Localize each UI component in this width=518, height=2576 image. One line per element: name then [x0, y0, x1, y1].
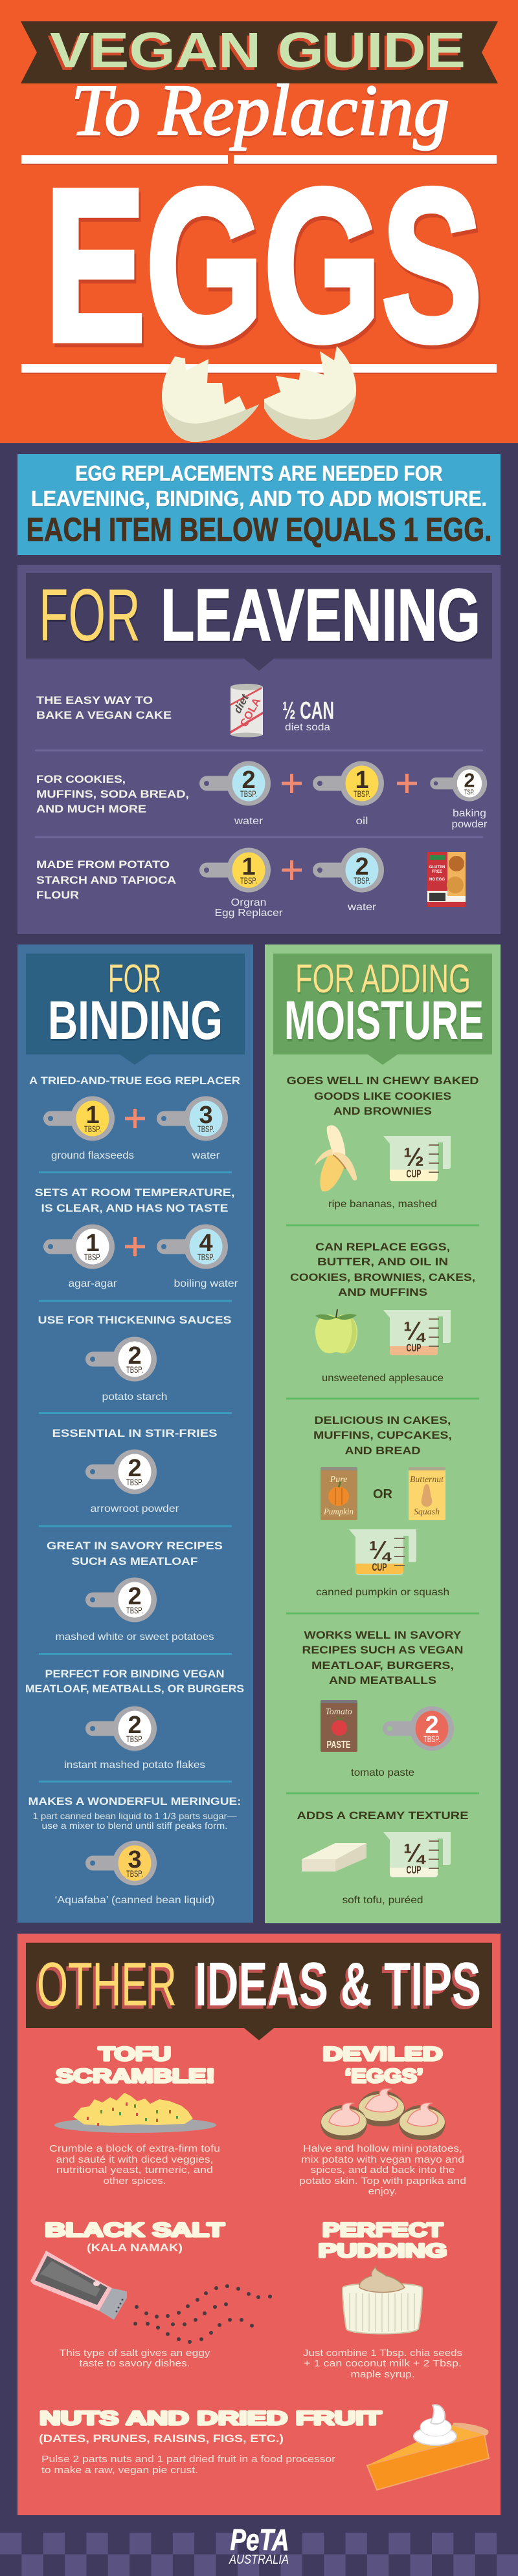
labels: leavening row two: water: [234, 816, 264, 827]
text: sets at room temperature: [35, 1187, 234, 1214]
row text: potato starch and tapioca: STARCH AND TAPIOCA: [36, 875, 176, 886]
plus: [125, 1237, 145, 1256]
icon: quarter cup tofu: ¼: [403, 1839, 426, 1868]
icon: salt grains: [133, 2284, 272, 2344]
spoon: 1 tbsp agar-agar: 1: [85, 1230, 100, 1257]
labels: flaxseeds and water: ground flaxseeds: [51, 1150, 134, 1161]
heading: for leavening: FOR: [39, 576, 141, 659]
plus: [125, 1109, 145, 1128]
spoon: 3 tbsp aquafaba: TBSP.: [126, 1869, 143, 1879]
icon: quarter cup applesauce: CUP: [407, 1342, 421, 1354]
labels: flaxseeds and water: [51, 1150, 220, 1161]
text: deviled eggs instructions: Halve and hollow mini potatoes,: [303, 2143, 462, 2154]
labels: leavening row three: Egg Replacer: [215, 908, 283, 919]
amount: half can diet soda: [282, 697, 334, 733]
text: tofu scramble instructions: other spices.: [104, 2176, 166, 2187]
spoon: 2 tsp baking powder: [430, 765, 487, 802]
labels: agar-agar and boiling water: boiling water: [174, 1278, 238, 1289]
divider line top: [21, 154, 497, 165]
spoon: 2 tbsp water: 2: [242, 767, 256, 794]
icon: canned squash: Butternut: [410, 1475, 444, 1485]
icon: diet cola can: COLA: [238, 695, 263, 729]
text: or: OR: [373, 1487, 393, 1501]
label: soft tofu: soft tofu, puréed: [342, 1895, 423, 1906]
heading: for leavening: FOR: [39, 574, 141, 657]
text: works well in savory: RECIPES SUCH AS VEGAN: [302, 1644, 464, 1656]
text: deviled eggs instructions: enjoy.: [368, 2186, 398, 2197]
spoon: 2 tbsp potato starch: TBSP.: [126, 1365, 143, 1375]
icon: quarter cup tofu: [383, 1832, 451, 1877]
label: tomato paste: tomato paste: [351, 1767, 414, 1778]
text: meringue: use a mixer to blend until stiff peaks form.: [41, 1820, 228, 1831]
spoon: 3 tbsp water: TBSP.: [197, 1124, 214, 1134]
text: nuts and dried fruit description: to make a raw, vegan pie crust.: [41, 2465, 198, 2476]
row text: potato starch and tapioca: [36, 859, 176, 901]
spoon: 2 tbsp potato flakes: TBSP.: [126, 1734, 143, 1744]
text: tofu scramble instructions: [49, 2143, 220, 2187]
icon: quarter cup applesauce: [383, 1310, 451, 1355]
heading: perfect pudding: PERFECT: [322, 2220, 443, 2241]
spoon: 1 tbsp agar-agar: [43, 1224, 115, 1269]
spoon: 2 tbsp water: TBSP.: [240, 789, 257, 799]
plus: [282, 860, 302, 880]
icon: diet cola can: [231, 684, 263, 737]
spoon: 1 tbsp egg replacer: [199, 847, 271, 893]
footer checker band: [0, 2533, 518, 2576]
text: works well in savory: [302, 1630, 464, 1686]
heading: other ideas and tips: [26, 1943, 492, 2040]
text: pudding description: Just combine 1 Tbsp. chia seeds: [303, 2348, 462, 2359]
spoon: 2 tbsp potato starch: 2: [128, 1342, 142, 1370]
amount: half can diet soda: ½ CAN: [282, 697, 334, 725]
text: binding vegan meatloaf: MEATLOAF, MEATBALLS, OR BURGERS: [25, 1683, 244, 1695]
heading: tofu scramble: [56, 2044, 215, 2087]
icon: tofu scramble plate: [54, 2093, 216, 2133]
row text: cookies and muffins: [36, 774, 189, 815]
text: can replace eggs: CAN REPLACE EGGS,: [315, 1241, 450, 1253]
heading: for binding: [26, 954, 245, 1065]
heading: for binding: FOR: [108, 957, 161, 1001]
text: deviled eggs instructions: [299, 2143, 466, 2197]
label: potato flakes: instant mashed potato flakes: [64, 1760, 205, 1771]
heading: perfect pudding: PUDDING: [319, 2240, 447, 2262]
text: thickening sauces: USE FOR THICKENING SAUCES: [38, 1315, 232, 1326]
labels: leavening row two: baking: [453, 808, 486, 819]
label: arrowroot powder: arrowroot powder: [91, 1503, 179, 1514]
text: deviled eggs instructions: mix potato with vegan mayo and: [301, 2154, 464, 2165]
spoon: 2 tbsp mashed potatoes: TBSP.: [126, 1606, 143, 1615]
spoon: 2 tbsp water: [313, 847, 384, 893]
spoon: 3 tbsp water: 3: [199, 1102, 213, 1129]
banner: vegan guide: [21, 21, 498, 83]
text: nuts and dried fruit description: Pulse 2 parts nuts and 1 part dried fruit in a food processor: [41, 2454, 335, 2465]
spoon: 2 tbsp arrowroot powder: 2: [128, 1455, 142, 1482]
icon: deviled potatoes: [321, 2089, 445, 2140]
icon: quarter cup squash: CUP: [372, 1561, 387, 1573]
spoon: 2 tbsp tomato paste: 2: [425, 1712, 439, 1739]
row text: cookies and muffins: AND MUCH MORE: [36, 803, 146, 815]
icon: quarter cup applesauce: ¼: [403, 1317, 426, 1346]
divider line bottom: [21, 364, 497, 374]
icon: orgran box: GLUTEN: [429, 866, 445, 869]
spoon: 2 tbsp tomato paste: [383, 1707, 454, 1751]
icon: half cup: CUP: [407, 1168, 421, 1180]
text: meringue: MAKES A WONDERFUL MERINGUE:: [28, 1796, 241, 1807]
icon: quarter cup squash: [349, 1529, 416, 1575]
text: can replace eggs: [290, 1241, 475, 1298]
panel: for binding: [17, 944, 253, 1923]
icon: quarter cup tofu: CUP: [407, 1864, 421, 1876]
spoon: 3 tbsp aquafaba: 3: [128, 1846, 142, 1873]
labels: leavening row two: powder: [452, 819, 488, 830]
label: applesauce: unsweetened applesauce: [322, 1373, 444, 1384]
label: potato starch: potato starch: [102, 1392, 167, 1403]
intro box: LEAVENING, BINDING, AND TO ADD MOISTURE.: [31, 488, 487, 511]
icon: orgran box: [427, 852, 466, 907]
spoon: 1 tbsp oil: [313, 761, 384, 806]
icon: pie slice: [367, 2405, 489, 2490]
intro box: [17, 454, 501, 555]
text: meringue: 1 part canned bean liquid to 1 1/3 parts sugar—: [32, 1811, 237, 1821]
heading: black salt: BLACK SALT: [45, 2220, 224, 2241]
panel: for leavening: [17, 565, 501, 934]
text: meringue: [28, 1796, 241, 1831]
amount: half can diet soda: diet soda: [285, 722, 330, 733]
icon: salt shaker: [30, 2251, 127, 2320]
heading: for binding: BINDING: [49, 992, 223, 1053]
text: delicious in cakes: MUFFINS, CUPCAKES,: [313, 1430, 452, 1441]
text: tofu scramble instructions: nutritional yeast, turmeric, and: [56, 2165, 213, 2176]
text: sets at room temperature: IS CLEAR, AND HAS NO TASTE: [41, 1203, 228, 1214]
spoon: 2 tbsp water: TBSP.: [354, 876, 370, 886]
text: binding vegan meatloaf: PERFECT FOR BINDING VEGAN: [45, 1668, 224, 1680]
plus: [282, 774, 302, 793]
icon: canned pumpkin: Pumpkin: [323, 1507, 354, 1517]
spoon: 1 tbsp agar-agar: TBSP.: [84, 1252, 101, 1262]
spoon: 2 tbsp mashed potatoes: [85, 1577, 157, 1622]
icon: canned pumpkin: Pure: [330, 1475, 347, 1485]
heading: deviled eggs: DEVILED: [322, 2044, 443, 2065]
heading: perfect pudding: [319, 2220, 447, 2262]
labels: agar-agar and boiling water: [69, 1278, 238, 1289]
heading: deviled eggs: ‘EGGS’: [344, 2066, 423, 2087]
logo: peta australia: AUSTRALIA: [229, 2553, 289, 2567]
spoon: 1 tbsp egg replacer: 1: [242, 853, 256, 880]
text: delicious in cakes: [313, 1415, 452, 1457]
icon: canned squash: [409, 1467, 445, 1520]
row text: easy vegan cake: [36, 695, 172, 721]
text: pudding description: + 1 can coconut milk + 2 Tbsp.: [304, 2358, 462, 2369]
icon: canned pumpkin: [321, 1467, 357, 1520]
text: savory recipes: GREAT IN SAVORY RECIPES: [47, 1540, 223, 1552]
subtitle: to replacing: To Replacing: [71, 72, 449, 153]
spoon: 4 tbsp boiling water: [157, 1224, 228, 1269]
text: savory recipes: SUCH AS MEATLOAF: [71, 1556, 198, 1567]
spoon: 2 tsp baking powder: TSP.: [464, 789, 475, 796]
heading: for binding: FOR: [109, 958, 162, 1003]
spoon: 2 tbsp potato flakes: 2: [128, 1712, 142, 1739]
heading: for leavening: [26, 573, 492, 671]
text: savory recipes: [47, 1540, 223, 1567]
text: works well in savory: WORKS WELL IN SAVORY: [304, 1630, 461, 1641]
heading: black salt: (KALA NAMAK): [87, 2242, 183, 2254]
text: pudding description: maple syrup.: [351, 2369, 414, 2380]
icon: canned squash: Squash: [414, 1507, 440, 1517]
intro box: LEAVENING, BINDING, AND TO ADD MOISTURE.: [31, 486, 487, 510]
text: nuts and dried fruit description: [41, 2454, 335, 2476]
spoon: 4 tbsp boiling water: 4: [199, 1230, 213, 1257]
spoon: 2 tbsp water: [199, 761, 271, 806]
intro box: EGG REPLACEMENTS ARE NEEDED FOR: [76, 462, 443, 486]
text: tofu scramble instructions: and sauté it with diced veggies,: [56, 2154, 214, 2165]
heading: other ideas and tips: OTHER: [34, 1953, 174, 2022]
text: chewy baked goods: GOES WELL IN CHEWY BAKED: [286, 1075, 479, 1087]
spoon: 2 tbsp water: 2: [355, 853, 369, 880]
icon: half cup: ½: [403, 1143, 424, 1172]
text: black salt description: [60, 2348, 210, 2369]
text: works well in savory: AND MEATBALLS: [329, 1675, 436, 1686]
icon: orgran box: FREE: [432, 870, 442, 874]
spoon: 1 tbsp ground flaxseeds: 1: [85, 1102, 100, 1129]
text: sets at room temperature: SETS AT ROOM TEMPERATURE,: [35, 1187, 234, 1199]
text: works well in savory: MEATLOAF, BURGERS,: [311, 1660, 454, 1672]
heading: deviled eggs: [322, 2044, 443, 2087]
label: canned pumpkin: canned pumpkin or squash: [316, 1587, 449, 1598]
icon: pudding ramekin: [343, 2267, 422, 2334]
text: delicious in cakes: AND BREAD: [344, 1445, 421, 1457]
heading: nuts and dried fruit: (DATES, PRUNES, RAISINS, FIGS, ETC.): [39, 2432, 284, 2445]
text: black salt description: This type of salt gives an eggy: [60, 2348, 210, 2359]
row text: easy vegan cake: THE EASY WAY TO: [36, 695, 153, 706]
spoon: 1 tbsp ground flaxseeds: [43, 1096, 115, 1141]
heading: nuts and dried fruit: [39, 2408, 381, 2445]
spoon: 1 tbsp egg replacer: TBSP.: [240, 876, 257, 886]
intro box: EGG REPLACEMENTS ARE NEEDED FOR: [75, 461, 443, 485]
heading: nuts and dried fruit: NUTS AND DRIED FRUIT: [39, 2408, 381, 2429]
text: tofu scramble instructions: Crumble a block of extra-firm tofu: [49, 2143, 220, 2154]
row text: easy vegan cake: BAKE A VEGAN CAKE: [36, 710, 172, 721]
text: chewy baked goods: GOODS LIKE COOKIES: [314, 1091, 451, 1102]
icon: orgran box: NO EGG: [429, 878, 445, 882]
text: can replace eggs: BUTTER, AND OIL IN: [317, 1256, 448, 1268]
text: black salt description: taste to savory dishes.: [79, 2358, 190, 2369]
spoon: 2 tbsp arrowroot powder: [85, 1449, 157, 1494]
panel: for adding moisture: [265, 944, 501, 1923]
spoon: 1 tbsp ground flaxseeds: TBSP.: [84, 1124, 101, 1134]
logo: peta australia: PeTA: [231, 2523, 289, 2557]
text: chewy baked goods: AND BROWNIES: [333, 1106, 432, 1117]
icon: tofu block: [302, 1843, 366, 1872]
spoon: 1 tbsp oil: TBSP.: [354, 789, 370, 799]
row text: potato starch and tapioca: MADE FROM POTATO: [36, 859, 170, 871]
icon: apple: [315, 1309, 357, 1353]
text: deviled eggs instructions: potato skin. Top with paprika and: [299, 2176, 466, 2187]
heading: other ideas and tips: OTHER: [37, 1950, 177, 2019]
text: creamy texture: ADDS A CREAMY TEXTURE: [297, 1810, 469, 1822]
heading: for adding moisture: [273, 954, 492, 1065]
labels: leavening row two: [234, 808, 488, 830]
icon: quarter cup squash: ¼: [369, 1536, 392, 1565]
icon: half cup: [383, 1136, 451, 1181]
spoon: 2 tbsp tomato paste: TBSP.: [423, 1734, 440, 1744]
spoon: 2 tsp baking powder: 2: [464, 770, 475, 792]
spoon: 3 tbsp aquafaba: [85, 1841, 157, 1885]
row text: cookies and muffins: FOR COOKIES,: [36, 774, 126, 785]
icon: diet cola can: diet: [231, 692, 252, 715]
icon: tomato paste can: PASTE: [326, 1740, 351, 1751]
icon: banana: [315, 1125, 357, 1192]
spoon: 3 tbsp water: [157, 1096, 228, 1141]
text: pudding description: [303, 2348, 462, 2380]
banner: vegan guide: VEGAN GUIDE: [47, 25, 463, 81]
label: mashed potatoes: mashed white or sweet potatoes: [56, 1632, 214, 1643]
labels: agar-agar and boiling water: agar-agar: [69, 1278, 117, 1289]
labels: leavening row three: Orgran: [231, 897, 267, 908]
icon: tomato paste can: [321, 1700, 357, 1752]
text: can replace eggs: COOKIES, BROWNIES, CAKES,: [290, 1272, 475, 1283]
row text: potato starch and tapioca: FLOUR: [36, 890, 79, 901]
text: deviled eggs instructions: spices, and add back into the: [311, 2165, 455, 2176]
icon: cracked eggshells: [162, 346, 356, 442]
row text: cookies and muffins: MUFFINS, SODA BREAD,: [36, 789, 189, 800]
title section: [0, 0, 518, 443]
text: essential in stir-fries: ESSENTIAL IN STIR-FRIES: [52, 1428, 218, 1439]
plus: [397, 774, 417, 793]
label: aquafaba: ‘Aquafaba’ (canned bean liquid): [54, 1895, 215, 1906]
spoon: 1 tbsp oil: 1: [355, 767, 369, 794]
spoon: 4 tbsp boiling water: TBSP.: [197, 1252, 214, 1262]
icon: tomato paste can: Tomato: [325, 1707, 352, 1717]
spoon: 2 tbsp mashed potatoes: 2: [128, 1583, 142, 1610]
panel: other ideas and tips: [17, 1934, 501, 2515]
labels: flaxseeds and water: water: [191, 1150, 220, 1161]
logo: peta australia: [229, 2523, 289, 2567]
spoon: 2 tbsp arrowroot powder: TBSP.: [126, 1478, 143, 1487]
heading: tofu scramble: SCRAMBLE!: [56, 2066, 215, 2087]
label: ripe bananas: ripe bananas, mashed: [328, 1199, 437, 1210]
banner: vegan guide: VEGAN GUIDE: [50, 23, 466, 78]
heading: black salt: [45, 2220, 224, 2254]
labels: leavening row two: oil: [356, 816, 368, 827]
text: binding vegan meatloaf: [25, 1668, 244, 1695]
subtitle: to replacing: To Replacing: [71, 71, 449, 151]
heading: for binding: BINDING: [48, 990, 223, 1051]
labels: leavening row three: [215, 897, 377, 919]
text: tried and true: A TRIED-AND-TRUE EGG REPLACER: [29, 1075, 240, 1087]
text: can replace eggs: AND MUFFINS: [338, 1287, 427, 1298]
text: delicious in cakes: DELICIOUS IN CAKES,: [315, 1415, 451, 1426]
labels: leavening row three: water: [347, 902, 377, 913]
spoon: 2 tbsp potato starch: [85, 1337, 157, 1382]
text: chewy baked goods: [286, 1075, 479, 1117]
heading: tofu scramble: TOFU: [98, 2044, 171, 2065]
spoon: 2 tbsp potato flakes: [85, 1707, 157, 1751]
